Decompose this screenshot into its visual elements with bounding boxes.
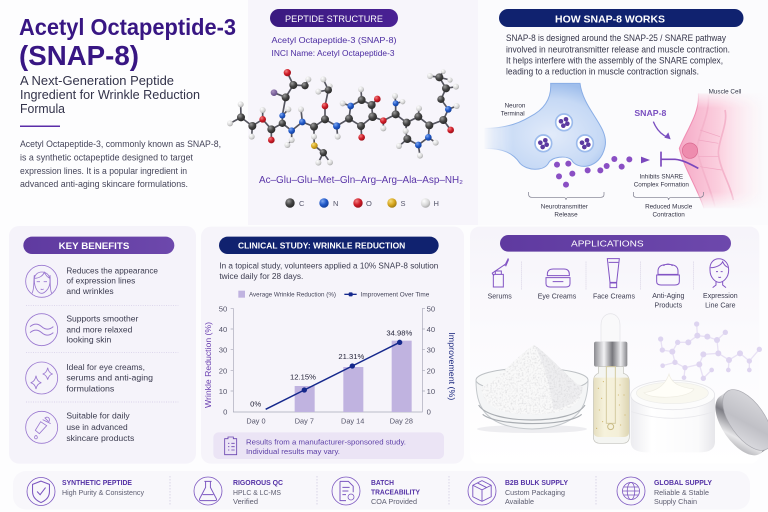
intro paragraph (20, 139, 221, 189)
bar chart with improvement line: 12.15% (290, 372, 316, 381)
benefit 3: formulations: formulations (66, 384, 114, 393)
study description: In a topical study, volunteers applied a 10% SNAP-8 solution (219, 260, 439, 270)
panel: bottom feature strip (13, 471, 750, 510)
heading: applications: APPLICATIONS (571, 239, 644, 249)
how it works paragraph: It helps interfere with the assembly of the SNARE complex, (506, 56, 723, 66)
feature: global supply (617, 477, 712, 506)
diagram labels: Release (554, 211, 578, 218)
panel: key benefits (9, 226, 196, 464)
bar chart with improvement line: 0 (427, 408, 431, 417)
bar chart with improvement line: Improvement (%) (447, 332, 457, 401)
title block (19, 14, 236, 71)
subtitle: Ingredient for Wrinkle Reduction (20, 87, 200, 102)
bar chart with improvement line: 40 (427, 325, 435, 334)
panel: clinical study (201, 227, 464, 464)
how it works paragraph: SNAP-8 is designed around the SNAP-25 / SNARE pathway (506, 33, 726, 43)
title block: Acetyl Octapeptide-3 (19, 14, 236, 40)
application: serums (488, 258, 512, 301)
bar chart with improvement line: 0 (223, 408, 227, 417)
benefit 2: smoother skin: and more relaxed (66, 325, 133, 334)
feature: batch traceability: COA Provided (371, 499, 417, 506)
product: powder in glass bowl (476, 345, 588, 433)
bar chart with improvement line: 21.31% (338, 352, 365, 361)
bar chart with improvement line: 20 (427, 366, 435, 375)
bar chart with improvement line: 50 (427, 304, 435, 313)
diagram labels: Neurotransmitter (541, 203, 588, 210)
feature: rigorous qc (194, 477, 283, 506)
application: expression line care: Expression (703, 293, 738, 300)
bar chart with improvement line: 34.98% (386, 328, 413, 337)
atom legend: O (366, 199, 372, 208)
product: cream jar (631, 374, 715, 452)
feature: rigorous qc: Verified (233, 499, 258, 506)
product: metal jar lid (706, 381, 768, 464)
molecule ball and stick diagram (227, 69, 460, 166)
atom legend: N (333, 199, 338, 208)
chart legend (238, 291, 430, 298)
diagram labels: Inhibits SNARE (640, 174, 683, 181)
application: face creams (593, 259, 635, 301)
inhibition arrow (641, 152, 698, 168)
feature: b2b bulk supply (468, 477, 568, 506)
application: expression line care: Line Care (705, 302, 736, 309)
panel: peptide structure background (248, 0, 478, 225)
disclaimer note: Results from a manufacturer-sponsored study. (246, 438, 406, 446)
diagram labels: Neuron (505, 103, 526, 110)
feature: rigorous qc: RIGOROUS QC (233, 480, 283, 487)
feature: synthetic peptide: High Purity & Consistency (62, 490, 145, 497)
diagram labels: Contraction (652, 211, 685, 218)
bar chart with improvement line: 40 (219, 325, 227, 334)
diagram labels: Reduced Muscle (645, 203, 693, 210)
heading: how snap-8 works (499, 9, 744, 27)
feature: b2b bulk supply: Available (505, 499, 534, 506)
bar chart with improvement line: 50 (219, 304, 227, 313)
bar chart with improvement line: Day 14 (341, 416, 364, 425)
bar chart with improvement line: 10 (219, 387, 227, 396)
heading: clinical study: CLINICAL STUDY: WRINKLE REDUCTION (238, 241, 405, 251)
disclaimer note: Individual results may vary. (246, 448, 340, 456)
benefit 4: daily use (26, 411, 134, 443)
how it works paragraph (506, 33, 730, 76)
brackets (529, 192, 703, 200)
neurotransmitter dots (554, 156, 632, 188)
bar chart with improvement line: 20 (219, 366, 227, 375)
benefit 1: expression lines: and wrinkles (66, 287, 114, 296)
heading: key benefits (23, 237, 174, 254)
atom legend (285, 198, 439, 208)
benefit 1: expression lines: of expression lines (66, 277, 135, 286)
application: eye creams (538, 269, 577, 301)
application: anti-aging products: Products (655, 302, 683, 309)
feature: batch traceability (332, 477, 420, 506)
bar chart with improvement line: 10 (427, 387, 435, 396)
intro paragraph: Acetyl Octapeptide-3, commonly known as SNAP-8, (20, 139, 221, 149)
feature: b2b bulk supply: B2B BULK SUPPLY (505, 480, 568, 487)
intro paragraph: expression lines. It is a popular ingredient in (20, 166, 187, 176)
application: eye creams: Eye Creams (538, 294, 577, 301)
benefit 4: daily use: Suitable for daily (66, 412, 131, 421)
bar chart with improvement line: 30 (427, 346, 435, 355)
diagram labels: Terminal (501, 111, 525, 118)
heading: how snap-8 works: HOW SNAP-8 WORKS (555, 14, 665, 26)
chart legend: Improvement Over Time (361, 291, 430, 298)
heading: peptide structure (270, 9, 398, 27)
application: serums: Serums (488, 294, 512, 301)
peptide names: INCI Name: Acetyl Octapeptide-3 (272, 48, 395, 58)
bar chart with improvement line: Day 28 (390, 416, 413, 425)
feature: global supply: Supply Chain (654, 499, 697, 506)
snap-8 label and arrow (634, 108, 671, 139)
decorative lavender molecule (658, 321, 762, 381)
heading: applications (500, 235, 731, 252)
application: anti-aging products: Anti-Aging (652, 293, 685, 300)
feature: b2b bulk supply: Custom Packaging (505, 490, 565, 497)
product: serum dropper bottle (593, 314, 629, 443)
muscle cell (678, 94, 752, 208)
feature: synthetic peptide: SYNTHETIC PEPTIDE (62, 480, 132, 487)
bar chart with improvement line (203, 304, 457, 425)
atom legend: H (434, 199, 439, 208)
bar chart with improvement line: 0% (250, 400, 261, 409)
benefit 2: smoother skin: looking skin (66, 336, 111, 345)
benefit 4: daily use: use in advanced (66, 423, 128, 432)
application: expression line care (703, 259, 738, 309)
intro paragraph: advanced anti-aging skincare formulations. (20, 179, 188, 189)
neuron terminal (485, 83, 605, 169)
feature: global supply: GLOBAL SUPPLY (654, 480, 712, 487)
diagram labels (501, 88, 741, 218)
feature: batch traceability: BATCH (371, 480, 394, 487)
intro paragraph: is a synthetic octapeptide designed to target (20, 152, 194, 162)
heading: key benefits: KEY BENEFITS (59, 241, 129, 251)
how it works paragraph: involved in neurotransmitter release and muscle contraction. (506, 44, 730, 54)
bar chart with improvement line: Day 7 (295, 416, 314, 425)
chart legend: Average Wrinkle Reduction (%) (249, 291, 336, 298)
subtitle (20, 73, 200, 116)
title block: (SNAP-8) (19, 40, 139, 71)
atom legend: C (299, 199, 305, 208)
application: anti-aging products (652, 264, 685, 309)
benefit 2: smoother skin (26, 314, 139, 346)
benefit 4: daily use: skincare products (66, 434, 134, 443)
subtitle: A Next-Generation Peptide (20, 73, 174, 88)
study description: twice daily for 28 days. (219, 271, 303, 281)
benefit 1: expression lines: Reduces the appearance (66, 266, 158, 275)
peptide names: Acetyl Octapeptide-3 (SNAP-8) (272, 35, 397, 45)
feature: batch traceability: TRACEABILITY (371, 490, 420, 496)
panel: how it works background (478, 0, 768, 225)
application: face creams: Face Creams (593, 294, 635, 301)
atom legend: S (400, 199, 406, 208)
heading: clinical study (219, 237, 439, 254)
mechanism diagram (485, 83, 768, 218)
diagram labels: Muscle Cell (709, 88, 741, 95)
bar chart with improvement line: 30 (219, 346, 227, 355)
feature: rigorous qc: HPLC & LC-MS (233, 490, 281, 497)
diagram labels: Complex Formation (634, 182, 689, 189)
bar chart with improvement line: Wrinkle Reduction (%) (203, 322, 213, 408)
benefit 1: expression lines (26, 265, 158, 297)
subtitle: Formula (20, 101, 66, 116)
benefit 3: formulations (26, 362, 153, 394)
feature: global supply: Reliable & Stable (654, 490, 709, 497)
benefit 3: formulations: Ideal for eye creams, (66, 363, 145, 372)
title rule (20, 126, 60, 127)
peptide sequence: Ac–Glu–Glu–Met–Gln–Arg–Arg–Ala–Asp–NH₂ (259, 175, 463, 186)
panel: applications (470, 227, 768, 464)
disclaimer note (213, 432, 444, 459)
bar chart with improvement line: Day 0 (246, 416, 266, 425)
benefit 2: smoother skin: Supports smoother (66, 315, 139, 324)
peptide names (272, 35, 397, 58)
feature: synthetic peptide (27, 478, 145, 506)
study description (219, 260, 439, 281)
how it works paragraph: leading to a reduction in muscle contraction signals. (506, 66, 699, 76)
benefit 3: formulations: serums and anti-aging (66, 374, 153, 383)
snap-8 label and arrow: SNAP-8 (634, 108, 667, 118)
heading: peptide structure: PEPTIDE STRUCTURE (285, 14, 383, 24)
